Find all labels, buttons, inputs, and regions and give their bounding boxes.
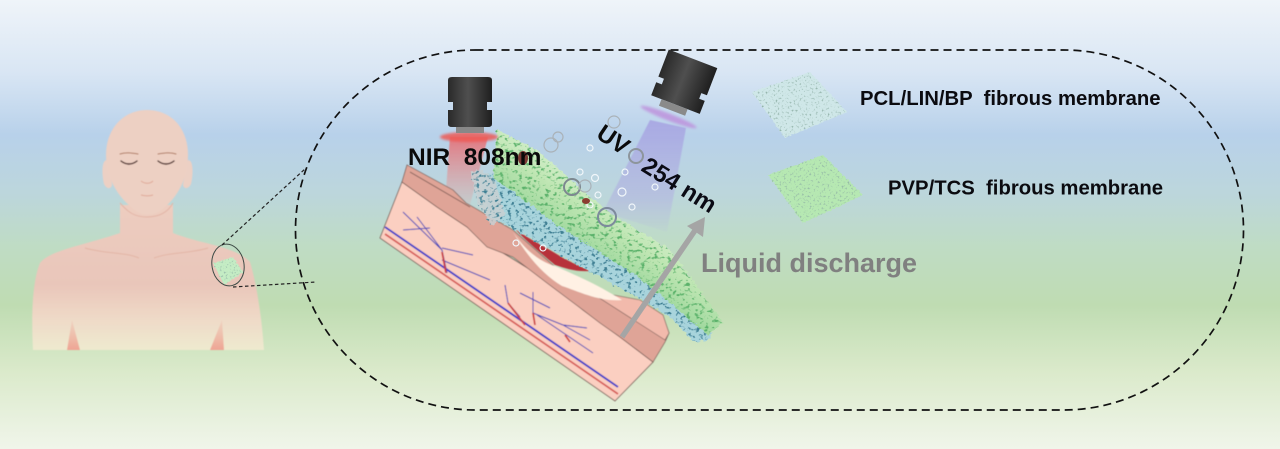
bubbles	[513, 116, 658, 251]
epidermis flap	[587, 290, 669, 340]
artery	[385, 234, 618, 394]
wound pale edge	[513, 232, 622, 300]
ears	[102, 160, 193, 188]
person figure	[32, 110, 264, 350]
skin block	[380, 165, 669, 401]
liquid discharge label: Liquid discharge	[701, 248, 917, 278]
torso and shoulders	[32, 205, 264, 350]
legend: PCL/LIN/BP membrane	[752, 72, 1161, 138]
swatch green	[768, 155, 863, 223]
capillaries	[403, 212, 593, 353]
zoom connector lines	[222, 168, 316, 287]
liquid discharge arrow	[622, 217, 705, 337]
NIR camera	[440, 77, 498, 142]
label: PCL/LIN/BP fibrous membrane	[860, 88, 1161, 110]
mini membrane patch	[213, 257, 243, 285]
NIR beam	[446, 137, 488, 205]
lower skin	[380, 182, 653, 401]
dermis layer	[402, 165, 669, 362]
UV label: UV	[592, 120, 634, 161]
armpit shadows	[67, 320, 224, 350]
eyes	[120, 153, 176, 164]
grey frayed fibres	[470, 170, 505, 226]
254 nm label: 254 nm	[637, 152, 721, 219]
magnifier circle on shoulder	[209, 242, 247, 288]
NIR label: NIR 808nm	[408, 144, 541, 171]
debris particles	[518, 151, 528, 165]
wound bed	[515, 229, 590, 271]
wound illustration	[380, 47, 723, 401]
epidermis line	[410, 172, 665, 338]
label: PVP/TCS fibrous membrane	[888, 178, 1163, 200]
swatch blue	[752, 72, 847, 138]
dashed callout outline	[296, 50, 1244, 410]
nose and mouth	[141, 181, 153, 196]
blue fibrous membrane	[478, 172, 712, 342]
head	[106, 110, 188, 215]
legend: PVP/TCS membrane	[768, 155, 1163, 223]
vein	[385, 227, 618, 387]
neck shadow and collar bones	[85, 203, 208, 258]
green fibrous membrane	[493, 130, 723, 335]
UV beam	[603, 120, 686, 232]
UV camera	[639, 47, 719, 131]
